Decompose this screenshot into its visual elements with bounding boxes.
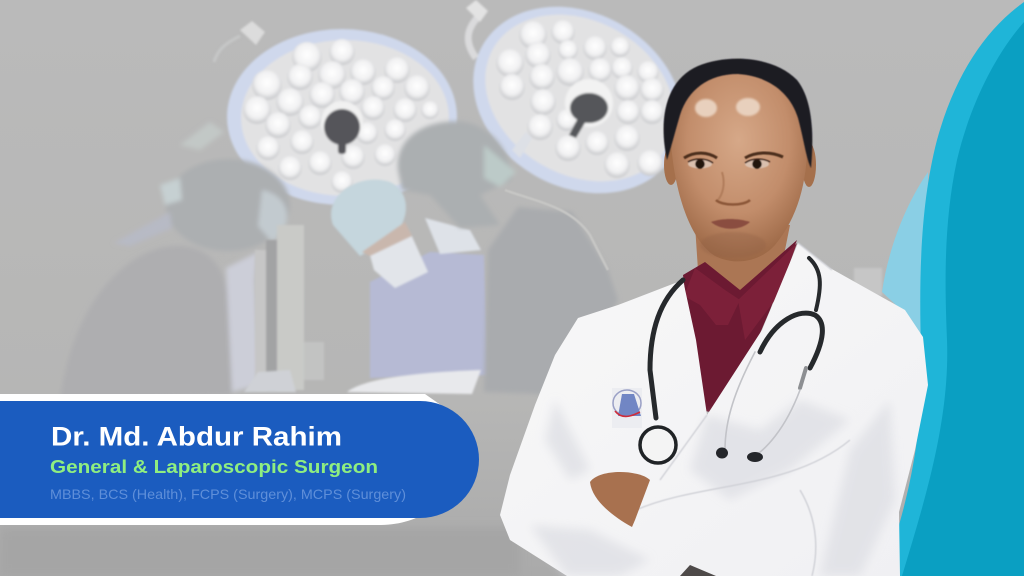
stethoscope chest piece and ear tips xyxy=(640,427,763,463)
pale blue wave xyxy=(882,172,930,360)
right surgeon xyxy=(398,121,618,395)
maroon shirt xyxy=(683,240,797,415)
dark teal wave xyxy=(902,22,1024,576)
face xyxy=(670,66,807,261)
gloved hands xyxy=(244,370,481,394)
head xyxy=(664,59,816,261)
doctor portrait xyxy=(500,59,928,576)
nose and mouth xyxy=(711,172,750,229)
lamp handle xyxy=(565,79,613,138)
white coat xyxy=(500,243,928,576)
banner blue pill xyxy=(0,401,479,518)
coat pocket logo xyxy=(612,388,642,428)
dim lower table area xyxy=(0,528,520,576)
stubble xyxy=(700,232,766,258)
lamp arm xyxy=(214,21,265,62)
watch at cuff xyxy=(680,565,716,576)
eyes and brows xyxy=(684,153,783,169)
banner white bottom edge xyxy=(0,510,430,525)
doctor name: Dr. Md. Abdur Rahim xyxy=(51,422,342,452)
surgical lamp right xyxy=(439,0,717,230)
left surgeon xyxy=(60,122,290,400)
lamp handle xyxy=(321,101,363,154)
coat fold lines xyxy=(636,243,850,576)
specialty: General & Laparoscopic Surgeon xyxy=(50,456,378,477)
hand on crossed arm xyxy=(590,472,650,527)
ears xyxy=(664,145,678,185)
forehead highlights xyxy=(695,99,717,117)
coat soft shadows xyxy=(530,400,895,576)
cyan wave xyxy=(899,2,1024,576)
right surgeon apron strap xyxy=(505,190,608,270)
name banner xyxy=(0,394,479,525)
brand wave shapes on the right xyxy=(882,2,1024,576)
neck xyxy=(695,225,790,300)
instrument tower xyxy=(255,225,324,390)
banner white top edge xyxy=(0,394,445,408)
centre surgeon xyxy=(331,180,488,378)
monitor patch at right xyxy=(854,268,882,296)
qualifications: MBBS, BCS (Health), FCPS (Surgery), MCPS (Surgery) xyxy=(50,486,406,502)
hair xyxy=(664,59,812,168)
stethoscope xyxy=(650,258,822,458)
lamp arm xyxy=(466,0,532,158)
surgical lamp left xyxy=(214,21,457,205)
